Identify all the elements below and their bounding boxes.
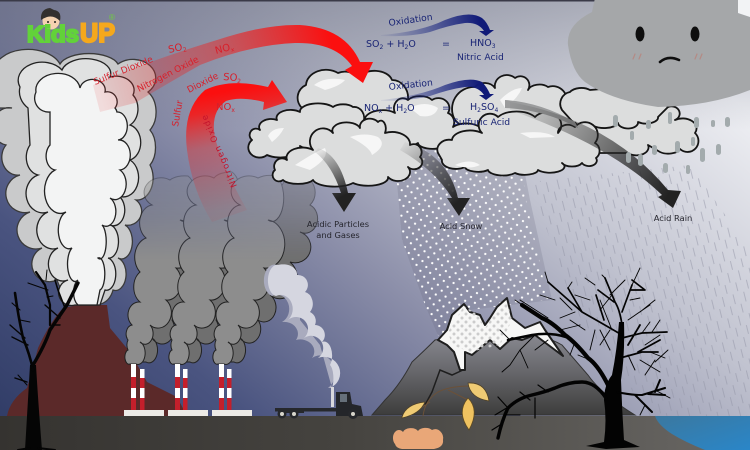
cloud right main <box>437 111 600 175</box>
cloud top center <box>298 70 408 125</box>
cloud upper right <box>452 75 580 135</box>
equation nox plus water: O <box>407 103 415 114</box>
arrow acid snow <box>400 142 470 216</box>
label dioxide so2 lower: Dioxide <box>186 71 221 96</box>
volcano smoke plume <box>0 49 156 305</box>
label acidic particles: Acidic Particles <box>307 219 369 229</box>
cloud highlights <box>268 79 555 170</box>
hno3: 3 <box>492 43 496 50</box>
nitric acid oxidation arrow <box>381 14 494 36</box>
h2so4: SO <box>481 102 494 113</box>
chimney group 1 <box>124 364 164 416</box>
logo registered mark: ® <box>109 13 115 22</box>
raindrops from sad cloud <box>613 112 730 174</box>
plume middle layer <box>18 59 141 305</box>
label nitrogen oxide upper: Nitrogen Oxide <box>136 55 201 95</box>
factory smoke plumes <box>125 172 318 364</box>
tree trunk <box>586 322 640 449</box>
white corner <box>738 0 750 17</box>
equation nox plus water: + H <box>382 103 403 114</box>
rain field <box>530 165 750 416</box>
equation so2 plus water: SO <box>366 39 380 50</box>
cloud left <box>248 103 365 158</box>
equation so2 plus water: O <box>408 39 416 50</box>
plant with wilted leaves <box>402 383 489 430</box>
back plumes <box>135 175 318 363</box>
sulfuric acid oxidation arrow <box>381 80 494 101</box>
label nox upper: NO <box>214 42 232 57</box>
h2so4: H <box>470 102 477 113</box>
snow haze <box>394 148 552 340</box>
label sulfur lower: Sulfur <box>171 99 186 128</box>
sad cloud character <box>568 0 750 107</box>
chemical equations <box>364 12 510 128</box>
nitric acid: Nitric Acid <box>457 52 504 63</box>
bare tree right <box>492 268 670 449</box>
label nox upper: x <box>230 46 236 54</box>
h2so4: 4 <box>494 107 498 114</box>
truck smoke <box>264 264 340 388</box>
sulfuric acid: Sulfuric Acid <box>453 117 510 128</box>
lake water <box>655 416 750 450</box>
hno3: HNO <box>470 38 492 49</box>
ground <box>0 416 750 450</box>
eyes <box>636 26 644 42</box>
label acid rain: Acid Rain <box>654 213 692 223</box>
leaf 1 <box>402 402 425 418</box>
orange pile <box>393 428 443 449</box>
sad cloud body <box>568 0 750 107</box>
volcano <box>7 305 187 416</box>
blush <box>633 54 702 59</box>
oxidation label 2: Oxidation <box>388 77 434 93</box>
red arrow upper <box>93 25 373 112</box>
equation nox plus water: 2 <box>403 108 407 115</box>
factory chimneys <box>124 364 252 416</box>
arrow acidic particles <box>315 148 356 212</box>
equation so2 plus water: + H <box>383 39 404 50</box>
label so2 upper: SO <box>167 42 184 56</box>
snow field <box>394 150 548 340</box>
cloud lower edge far right <box>575 107 668 129</box>
label acidic particles: and Gases <box>316 230 360 240</box>
equals 1: = <box>442 39 450 50</box>
plume outer layer <box>0 49 156 305</box>
label nox lower: NO <box>216 102 231 113</box>
label acid snow: Acid Snow <box>440 221 483 231</box>
cloud shading streak <box>505 100 578 128</box>
label so2 upper: 2 <box>182 46 188 54</box>
equation nox plus water: x <box>379 108 383 115</box>
label so2 lower: SO <box>223 72 238 84</box>
label nox lower: x <box>231 107 235 114</box>
truck <box>275 387 363 419</box>
equation nox plus water: NO <box>364 103 379 114</box>
logo text: Kids <box>27 21 79 47</box>
equation so2 plus water: 2 <box>404 44 408 51</box>
leaf 2 <box>462 398 474 430</box>
chimney group 3 <box>212 364 252 416</box>
label nitrogen oxide lower: Nitrogen Oxide <box>200 113 240 189</box>
mouth <box>660 58 679 62</box>
label sulfur dioxide upper: Sulfur Dioxide <box>92 55 155 88</box>
cloud center <box>365 96 484 150</box>
clouds <box>248 70 698 187</box>
cloud lower left <box>273 119 422 187</box>
mountain <box>372 330 635 415</box>
equation so2 plus water: 2 <box>380 44 384 51</box>
plume inner layer <box>35 73 130 305</box>
arrow acid rain <box>510 102 681 208</box>
snow cap <box>438 298 563 370</box>
label so2 lower: 2 <box>237 78 241 85</box>
mountain crack <box>425 370 463 405</box>
bare tree left <box>10 270 78 450</box>
leaf 3 <box>468 383 489 401</box>
logo text up: UP <box>80 18 115 48</box>
logo boy head <box>41 8 60 30</box>
emission labels <box>92 41 242 189</box>
oxidation label 1: Oxidation <box>388 12 433 29</box>
front plumes <box>125 172 285 364</box>
red arrow lower <box>186 80 287 222</box>
equals 2: = <box>442 103 450 114</box>
h2so4: 2 <box>477 107 481 114</box>
chimney group 2 <box>168 364 208 416</box>
KidsUP logo <box>27 8 115 48</box>
cloud far right <box>560 85 698 155</box>
